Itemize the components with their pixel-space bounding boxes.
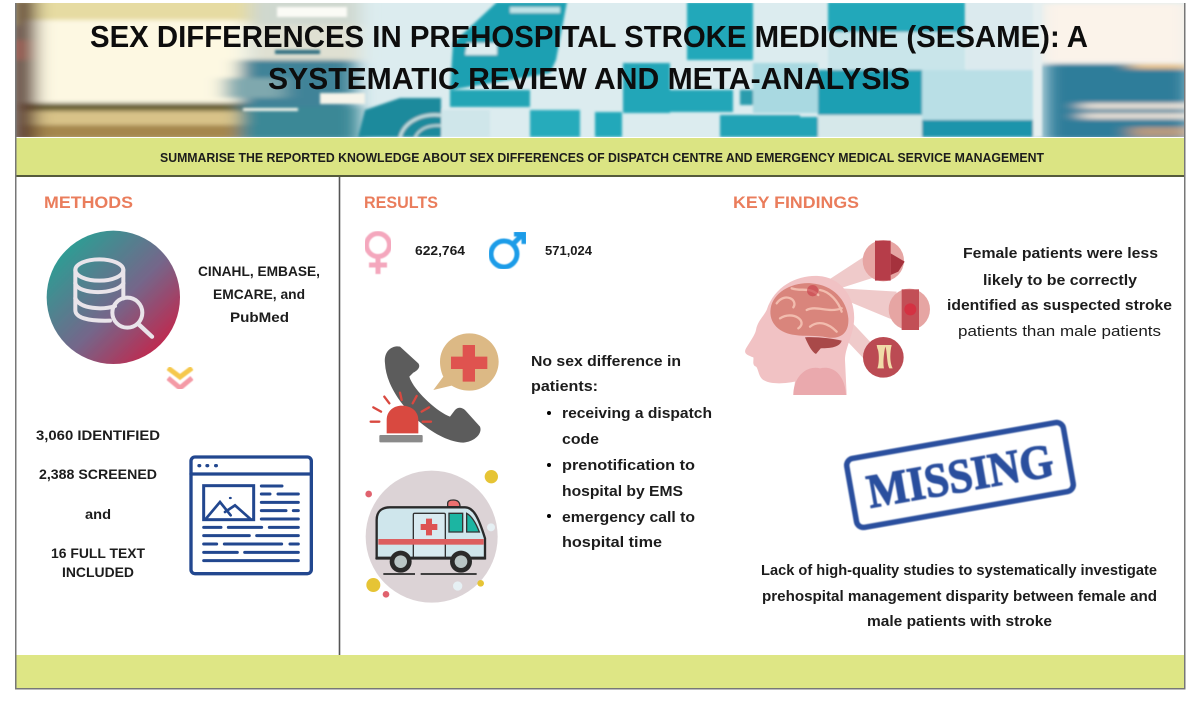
text: finding on identification: likely to be correctly xyxy=(983,272,1138,289)
stamp: missing: MISSING xyxy=(863,434,1057,519)
text: no sex difference list: hospital by EMS xyxy=(562,483,683,500)
text: finding on identification xyxy=(947,245,1172,340)
text: no sex difference list: prenotification to xyxy=(562,457,695,474)
text: databases xyxy=(198,263,320,325)
heading: key findings: KEY FINDINGS xyxy=(733,193,859,212)
heading: methods: METHODS xyxy=(44,193,133,212)
text: lack of studies: Lack of high-quality studies to systematically investigate xyxy=(761,563,1157,579)
header photo: blurred ambulance background xyxy=(0,0,1190,140)
icon: female symbol xyxy=(366,234,390,274)
text: no sex difference list: patients: xyxy=(531,378,598,395)
text: study counts: and xyxy=(85,506,111,522)
heading: results: RESULTS xyxy=(364,193,438,212)
icon: brain in head with vessel details xyxy=(745,240,930,395)
icon: male symbol xyxy=(491,234,524,267)
icon: database search xyxy=(47,231,180,364)
aim banner xyxy=(16,138,1184,175)
aim banner: SUMMARISE THE REPORTED KNOWLEDGE ABOUT SEX DIFFERENCES OF DISPATCH CENTRE AND EMERGENCY MEDICAL SERVICE MANAGEMENT xyxy=(160,151,1044,165)
footer band xyxy=(16,655,1184,688)
text: study counts: 2,388 SCREENED xyxy=(39,466,157,482)
panel: results xyxy=(364,193,712,603)
text: finding on identification: identified as suspected stroke xyxy=(947,297,1172,314)
title: SYSTEMATIC REVIEW AND META-ANALYSIS xyxy=(268,61,910,96)
female count: 622,764 xyxy=(415,244,465,258)
title xyxy=(90,19,1088,96)
text: no sex difference list: hospital time xyxy=(562,534,662,551)
male count: 571,024 xyxy=(545,244,592,258)
text: lack of studies: male patients with stroke xyxy=(867,614,1052,630)
text: study counts xyxy=(36,427,160,580)
icon: ambulance xyxy=(365,470,498,603)
icon: emergency phone call xyxy=(371,333,499,443)
title: SEX DIFFERENCES IN PREHOSPITAL STROKE MEDICINE (SESAME): A xyxy=(90,19,1088,54)
text: study counts: 3,060 IDENTIFIED xyxy=(36,427,160,443)
panel: methods xyxy=(36,193,320,580)
text: no sex difference list xyxy=(531,353,712,551)
text: study counts: 16 FULL TEXT xyxy=(51,545,145,561)
text: no sex difference list: code xyxy=(562,431,599,448)
icon: web article xyxy=(191,457,311,574)
text: databases: PubMed xyxy=(230,309,289,325)
text: lack of studies: prehospital management disparity between female and xyxy=(762,589,1157,605)
text: no sex difference list: emergency call to xyxy=(562,509,695,526)
icon: double chevron arrow xyxy=(168,368,192,388)
text: study counts: INCLUDED xyxy=(62,564,134,580)
text: no sex difference list: receiving a dispatch xyxy=(562,405,712,422)
text: finding on identification: patients than male patients xyxy=(958,323,1161,340)
text: finding on identification: Female patients were less xyxy=(963,245,1158,262)
panel: key findings xyxy=(733,193,1172,630)
text: no sex difference list: No sex difference in xyxy=(531,353,681,370)
text: databases: EMCARE, and xyxy=(213,286,305,302)
text: lack of studies xyxy=(761,563,1157,630)
text: databases: CINAHL, EMBASE, xyxy=(198,263,320,279)
